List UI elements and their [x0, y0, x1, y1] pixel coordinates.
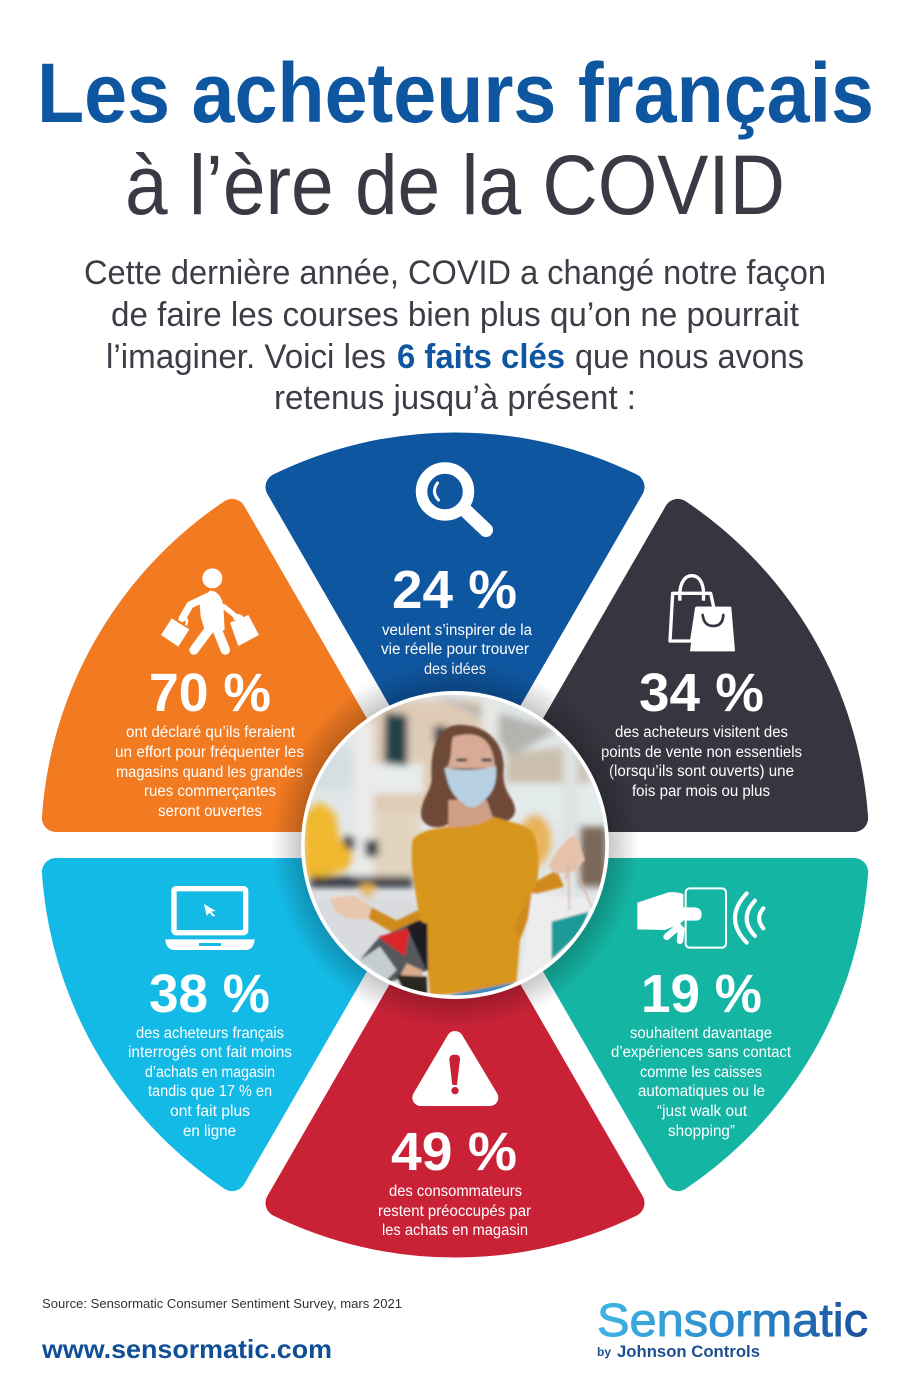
text: 49 % description: restent préoccupés par: [378, 1203, 531, 1220]
intro text: [84, 254, 826, 417]
text: 70 % description: un effort pour fréquenter les: [115, 744, 304, 761]
stat: 34 %: 34 %: [639, 663, 764, 723]
text: 38 % description: tandis que 17 % en: [148, 1083, 272, 1100]
icon: magnifying glass: [422, 468, 486, 530]
text: 49 % description: [378, 1183, 531, 1239]
icon: shopping bags: [670, 576, 734, 651]
text: 34 % description: fois par mois ou plus: [632, 783, 770, 800]
text: 70 % description: seront ouvertes: [158, 803, 262, 820]
panel: 49 % red segment: [280, 899, 630, 1244]
text: 49 % description: les achats en magasin: [382, 1222, 528, 1239]
stat: 24 %: 24 %: [392, 560, 517, 620]
intro text: retenus jusqu’à présent :: [274, 379, 636, 417]
logo: Sensormatic by Johnson Controls: Sensormatic: [597, 1294, 868, 1346]
source note: Source: Sensormatic Consumer Sentiment Survey, mars 2021: [42, 1296, 402, 1311]
stat: 38 %: 38 %: [149, 964, 270, 1024]
panel: 24 % blue segment: [280, 446, 630, 791]
text: 34 % description: des acheteurs visitent des: [615, 724, 788, 741]
text: 70 % description: rues commerçantes: [144, 783, 276, 800]
text: 19 % description: [611, 1025, 792, 1140]
text: 24 % description: veulent s’inspirer de la: [382, 622, 532, 639]
text: 38 % description: ont fait plus: [170, 1103, 250, 1120]
text: 49 % description: des consommateurs: [389, 1183, 522, 1200]
text: 38 % description: interrogés ont fait moins: [128, 1044, 292, 1061]
icon: person with bags: [161, 568, 259, 650]
panel: 38 % light blue segment: [56, 872, 408, 1177]
text: 19 % description: automatiques ou le: [638, 1083, 765, 1100]
intro text: l’imaginer. Voici les: [106, 338, 386, 376]
text: 19 % description: d’expériences sans contact: [611, 1044, 792, 1061]
text: 19 % description: comme les caisses: [640, 1064, 762, 1081]
text: 38 % description: des acheteurs français: [136, 1025, 284, 1042]
intro text: que nous avons: [575, 338, 804, 376]
text: 34 % description: (lorsqu’ils sont ouverts) une: [609, 763, 794, 780]
intro text: 6 faits clés: [397, 338, 565, 376]
text: 24 % description: [381, 622, 532, 678]
title: [37, 46, 874, 232]
text: 19 % description: shopping”: [668, 1123, 735, 1140]
panel: 19 % teal segment: [502, 872, 854, 1177]
panel: 70 % orange segment: [56, 513, 408, 820]
title: à l’ère de la COVID: [125, 138, 785, 232]
logo: Sensormatic by Johnson Controls: Johnson Controls: [617, 1342, 760, 1361]
text: 70 % description: [115, 724, 304, 820]
stat: 19 %: 19 %: [641, 964, 762, 1024]
text: 19 % description: “just walk out: [657, 1103, 748, 1120]
icon: warning triangle: [421, 1039, 490, 1098]
website url: www.sensormatic.com: [41, 1334, 332, 1364]
text: 38 % description: d’achats en magasin: [145, 1064, 275, 1081]
central photo: masked shopper: [271, 661, 639, 1029]
icon: laptop: [165, 889, 255, 950]
icon: contactless payment: [637, 888, 763, 948]
text: 38 % description: [128, 1025, 292, 1140]
stat: 49 %: 49 %: [391, 1122, 517, 1182]
intro text: de faire les courses bien plus qu’on ne pourrait: [111, 296, 800, 334]
text: 34 % description: points de vente non essentiels: [601, 744, 802, 761]
text: 19 % description: souhaitent davantage: [630, 1025, 772, 1042]
panel: 34 % dark segment: [502, 513, 854, 818]
text: 34 % description: [601, 724, 802, 800]
text: 38 % description: en ligne: [183, 1123, 236, 1140]
stat: 70 %: 70 %: [149, 663, 271, 723]
intro text: Cette dernière année, COVID a changé notre façon: [84, 254, 826, 292]
text: 70 % description: magasins quand les grandes: [116, 764, 303, 781]
text: 24 % description: vie réelle pour trouver: [381, 641, 529, 658]
logo: Sensormatic by Johnson Controls: by: [597, 1345, 611, 1359]
text: 24 % description: des idées: [424, 661, 486, 678]
text: 70 % description: ont déclaré qu’ils feraient: [126, 724, 296, 741]
